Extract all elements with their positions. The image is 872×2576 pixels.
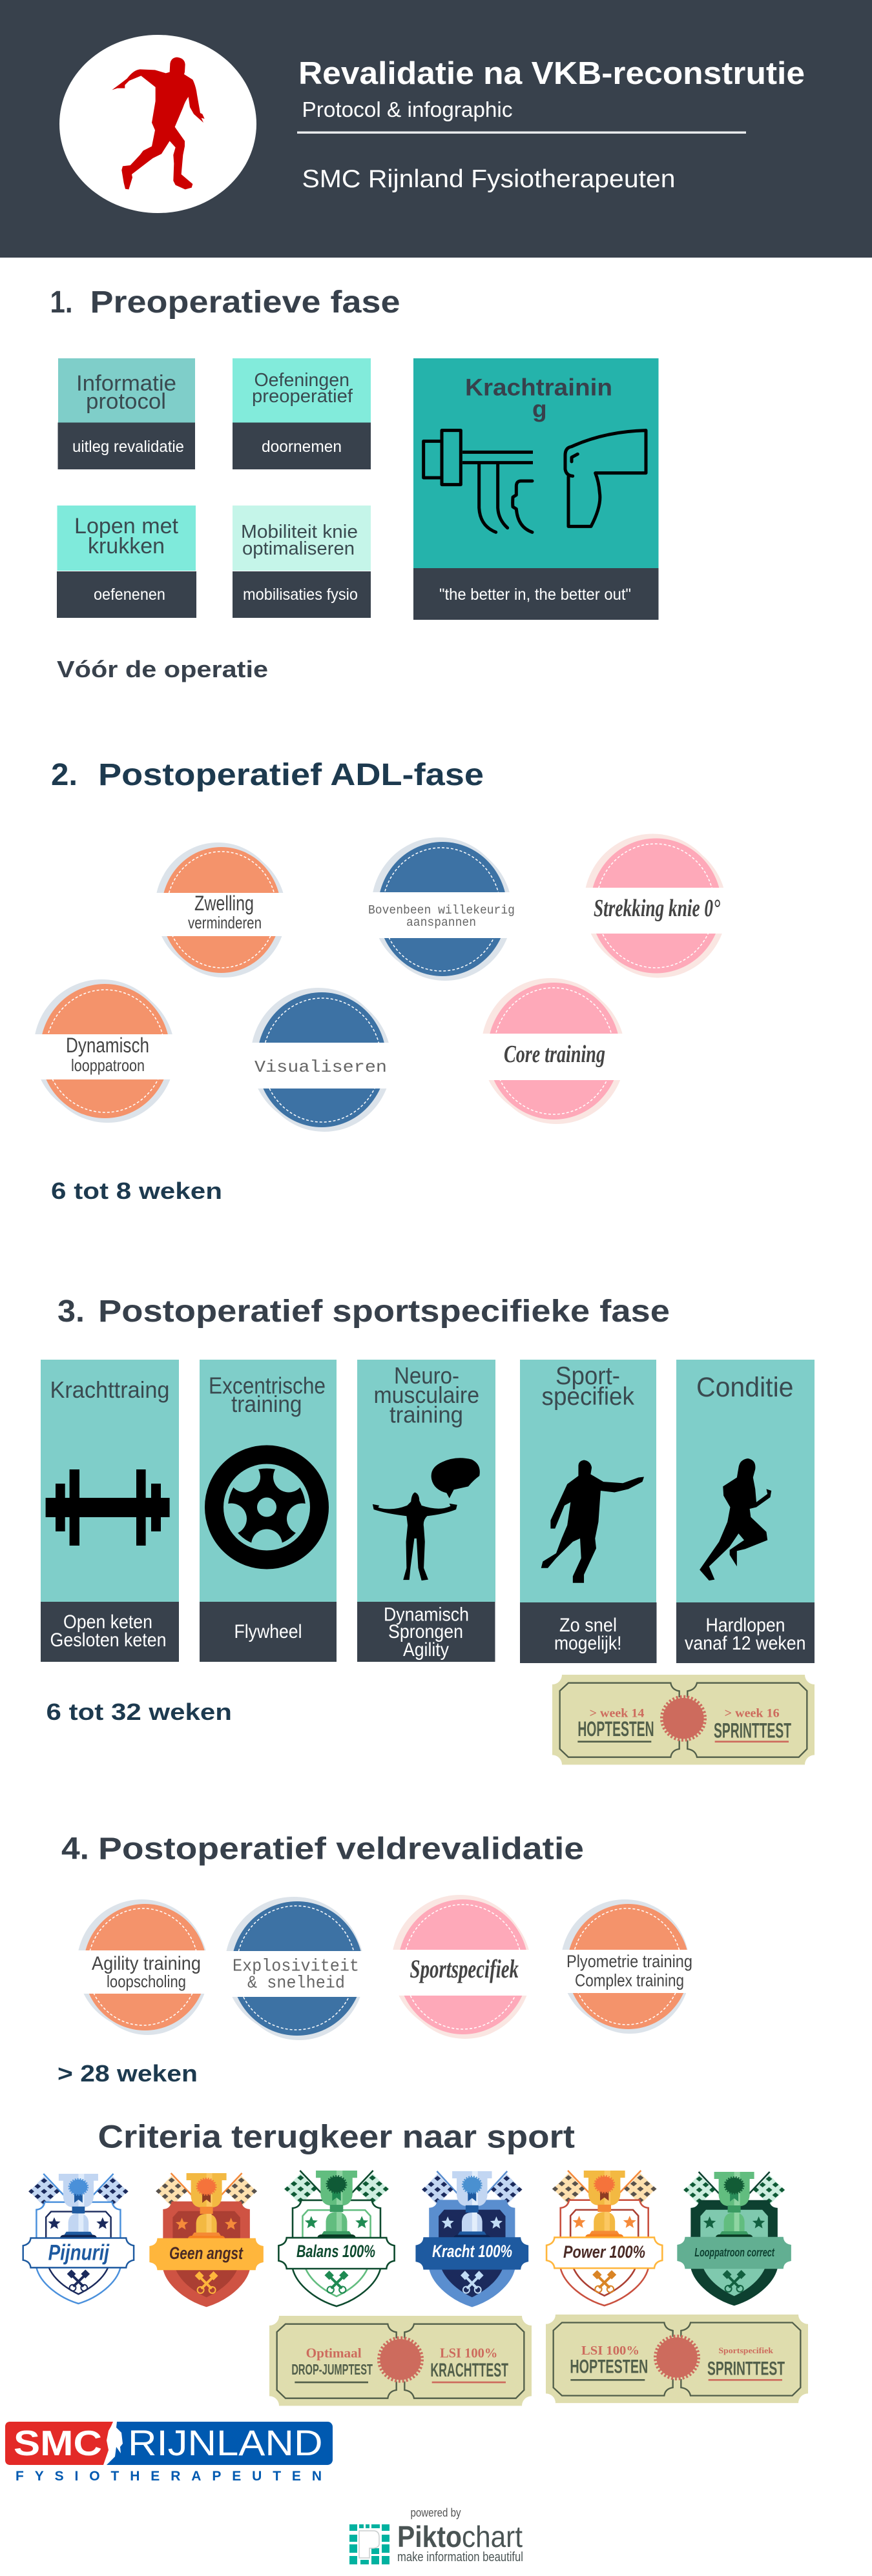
timing: 6 tot 8 weken: 6 tot 8 weken xyxy=(51,1178,222,1204)
icon: runner xyxy=(700,1458,771,1580)
column: excentrische training: training xyxy=(231,1391,302,1417)
column: neuromusculaire training: Dynamisch xyxy=(384,1604,469,1626)
ticket: drop-jump krachttest: Optimaal xyxy=(306,2346,362,2360)
heading: criteria: Criteria terugkeer naar sport xyxy=(98,2119,575,2155)
circle badge: dynamisch looppatroon xyxy=(32,979,177,1123)
card: lopen met krukken: oefenenen xyxy=(94,586,165,604)
circle badge: agility training xyxy=(76,1899,210,2035)
ticket: hoptesten sprinttest weeks: SPRINTTEST xyxy=(714,1719,791,1743)
badge: power 100%: Power 100% xyxy=(563,2242,645,2262)
icon: piktochart grid xyxy=(349,2524,389,2564)
card: mobiliteit knie: mobilisaties fysio xyxy=(243,586,358,604)
card: mobiliteit knie: optimaliseren xyxy=(242,538,355,559)
circle badge: bovenbeen aanspannen: aanspannen xyxy=(406,915,476,930)
column: conditie xyxy=(676,1360,815,1663)
circle badge: visualiseren xyxy=(249,988,394,1132)
card: informatie protocol xyxy=(58,358,195,469)
icon: running player in circle xyxy=(59,35,256,213)
organisation name: SMC Rijnland Fysiotherapeuten xyxy=(302,165,676,193)
ticket: hoptesten sprinttest criteria: SPRINTTEST xyxy=(707,2358,785,2379)
ticket: hoptesten sprinttest criteria: Sportspecifiek xyxy=(718,2346,774,2355)
badge: kracht 100%: Kracht 100% xyxy=(432,2242,512,2261)
card: informatie protocol: uitleg revalidatie xyxy=(72,438,184,456)
circle badge: bovenbeen aanspannen xyxy=(368,837,515,981)
card: oefeningen preoperatief: Oefeningen xyxy=(254,370,349,391)
timing: voor de operatie: Vóór de operatie xyxy=(57,656,268,682)
circle badge: explosiviteit xyxy=(223,1897,366,2040)
ticket: hoptesten sprinttest criteria xyxy=(546,2315,808,2403)
ticket: hoptesten sprinttest criteria: HOPTESTEN xyxy=(570,2356,648,2377)
logo: SMC Rijnland xyxy=(5,2422,333,2484)
card: informatie protocol: protocol xyxy=(86,389,166,414)
card: krachttraining: "the better in, the better out" xyxy=(439,586,631,604)
circle badge: zwelling: Zwelling xyxy=(194,892,254,915)
circle badge: dynamisch looppatroon: Dynamisch xyxy=(66,1034,149,1057)
circle badge: core training: Core training xyxy=(504,1041,605,1068)
circle badge: sportspecifiek: Sportspecifiek xyxy=(410,1954,519,1983)
logo: SMC Rijnland: RIJNLAND xyxy=(128,2422,323,2463)
icon: knee strength xyxy=(424,431,646,532)
subtitle: Protocol & infographic xyxy=(302,97,513,121)
column: excentrische training xyxy=(200,1360,337,1662)
card: mobiliteit knie xyxy=(233,506,371,618)
column: conditie: Hardlopen xyxy=(705,1615,785,1636)
column: excentrische training: Flywheel xyxy=(234,1621,302,1642)
circle badge: zwelling: verminderen xyxy=(188,913,262,932)
badge: pijnvrij xyxy=(23,2174,134,2304)
badge: looppatroon correct xyxy=(678,2172,791,2305)
badge: geen angst xyxy=(151,2173,263,2306)
column: krachttraining: Open keten xyxy=(63,1611,152,1633)
ticket: drop-jump krachttest: KRACHTTEST xyxy=(430,2360,508,2381)
circle badge: sportspecifiek xyxy=(390,1895,533,2039)
card: lopen met krukken: krukken xyxy=(88,534,165,558)
column: sportspecifiek: mogelijk! xyxy=(554,1633,621,1654)
column: conditie: vanaf 12 weken xyxy=(685,1633,806,1654)
circle badge: plyometrie: Plyometrie training xyxy=(566,1952,692,1971)
badge: balans 100%: Balans 100% xyxy=(296,2242,375,2261)
logo: powered by Piktochart: powered by xyxy=(411,2506,461,2519)
ticket: hoptesten sprinttest weeks: > week 14 xyxy=(590,1706,644,1720)
column: neuromusculaire training: training xyxy=(389,1401,463,1428)
card: oefeningen preoperatief xyxy=(233,358,371,469)
column: sportspecifiek: Zo snel xyxy=(559,1615,617,1636)
column: neuromusculaire training: Sprongen xyxy=(388,1621,463,1642)
icon: figure with brain xyxy=(373,1458,480,1580)
ticket: hoptesten sprinttest weeks xyxy=(552,1675,815,1764)
card: krachttraining: g xyxy=(532,396,547,422)
card: oefeningen preoperatief: doornemen xyxy=(262,438,342,456)
circle badge: explosiviteit: & snelheid xyxy=(247,1974,345,1994)
logo: SMC Rijnland: SMC xyxy=(14,2423,102,2463)
logo: powered by Piktochart xyxy=(349,2506,523,2564)
column: krachttraining: Gesloten keten xyxy=(50,1630,167,1651)
ticket: drop-jump krachttest: DROP-JUMPTEST xyxy=(291,2361,373,2378)
circle badge: dynamisch looppatroon: looppatroon xyxy=(71,1056,145,1075)
circle badge: plyometrie: Complex training xyxy=(575,1970,684,1990)
ticket: hoptesten sprinttest criteria: LSI 100% xyxy=(581,2344,639,2358)
column: krachttraining: Krachttraing xyxy=(50,1376,169,1403)
ticket: drop-jump krachttest xyxy=(269,2316,532,2406)
ticket: hoptesten sprinttest weeks: HOPTESTEN xyxy=(577,1717,654,1741)
badge: power 100% xyxy=(546,2171,662,2305)
icon: barbell xyxy=(46,1469,170,1546)
column: sportspecifiek xyxy=(520,1360,656,1663)
column: krachttraining xyxy=(41,1360,179,1662)
column: neuromusculaire training: Neuro- xyxy=(394,1362,459,1389)
heading: section 1: 1. xyxy=(50,285,72,320)
column: excentrische training: Excentrische xyxy=(209,1373,326,1398)
circle badge: plyometrie xyxy=(559,1899,692,2034)
heading: section 1: Preoperatieve fase xyxy=(90,285,400,320)
circle badge: visualiseren: Visualiseren xyxy=(254,1058,387,1077)
icon: flywheel xyxy=(214,1455,319,1560)
card: informatie protocol: Informatie xyxy=(76,371,176,396)
header banner xyxy=(0,0,872,258)
badge: looppatroon correct: Looppatroon correct xyxy=(694,2246,775,2259)
badge: kracht 100% xyxy=(417,2171,528,2306)
logo: powered by Piktochart: Piktochart xyxy=(397,2520,523,2553)
circle badge: core training xyxy=(480,978,626,1124)
card: oefeningen preoperatief: preoperatief xyxy=(252,386,353,407)
circle badge: strekking knie: Strekking knie 0° xyxy=(594,895,720,922)
badge: pijnvrij: Pijnurij xyxy=(48,2241,110,2265)
circle badge: bovenbeen aanspannen: Bovenbeen willekeurig xyxy=(368,903,515,917)
heading: section 4: 4. xyxy=(61,1832,89,1866)
circle badge: strekking knie xyxy=(584,834,727,977)
heading: section 4: Postoperatief veldrevalidatie xyxy=(98,1832,584,1866)
card: lopen met krukken xyxy=(57,506,196,618)
card: krachttraining xyxy=(413,358,659,620)
badge: balans 100% xyxy=(278,2171,395,2306)
column: neuromusculaire training: Agility xyxy=(403,1639,449,1661)
circle badge: agility training: loopscholing xyxy=(107,1972,186,1991)
column: neuromusculaire training: musculaire xyxy=(373,1382,479,1408)
card: mobiliteit knie: Mobiliteit knie xyxy=(241,522,358,542)
card: lopen met krukken: Lopen met xyxy=(74,514,179,538)
logo: powered by Piktochart: make information beautiful xyxy=(397,2550,523,2564)
column: sportspecifiek: Sport- xyxy=(555,1362,620,1390)
badge: geen angst: Geen angst xyxy=(169,2244,244,2263)
column: neuromusculaire training xyxy=(357,1360,495,1662)
heading: section 3: Postoperatief sportspecifieke fase xyxy=(98,1294,670,1329)
timing: 6 tot 32 weken: 6 tot 32 weken xyxy=(47,1699,232,1725)
card: krachttraining: Krachtrainin xyxy=(465,374,612,400)
column: conditie: Conditie xyxy=(696,1372,793,1403)
heading: section 3: 3. xyxy=(57,1294,85,1329)
circle badge: zwelling xyxy=(154,843,286,977)
ticket: drop-jump krachttest: LSI 100% xyxy=(440,2346,497,2360)
ticket: hoptesten sprinttest weeks: > week 16 xyxy=(725,1706,780,1720)
column: sportspecifiek: specifiek xyxy=(541,1383,634,1411)
circle badge: explosiviteit: Explosiviteit xyxy=(233,1958,359,1977)
title: Revalidatie na VKB-reconstrutie xyxy=(298,56,805,91)
logo: SMC Rijnland: FYSIOTHERAPEUTEN xyxy=(16,2469,322,2484)
circle badge: agility training: Agility training xyxy=(92,1953,201,1974)
heading: section 2: Postoperatief ADL-fase xyxy=(98,758,484,792)
heading: section 2: 2. xyxy=(51,758,78,792)
icon: football player xyxy=(541,1460,644,1583)
timing: meer dan 28 weken: > 28 weken xyxy=(57,2060,198,2087)
